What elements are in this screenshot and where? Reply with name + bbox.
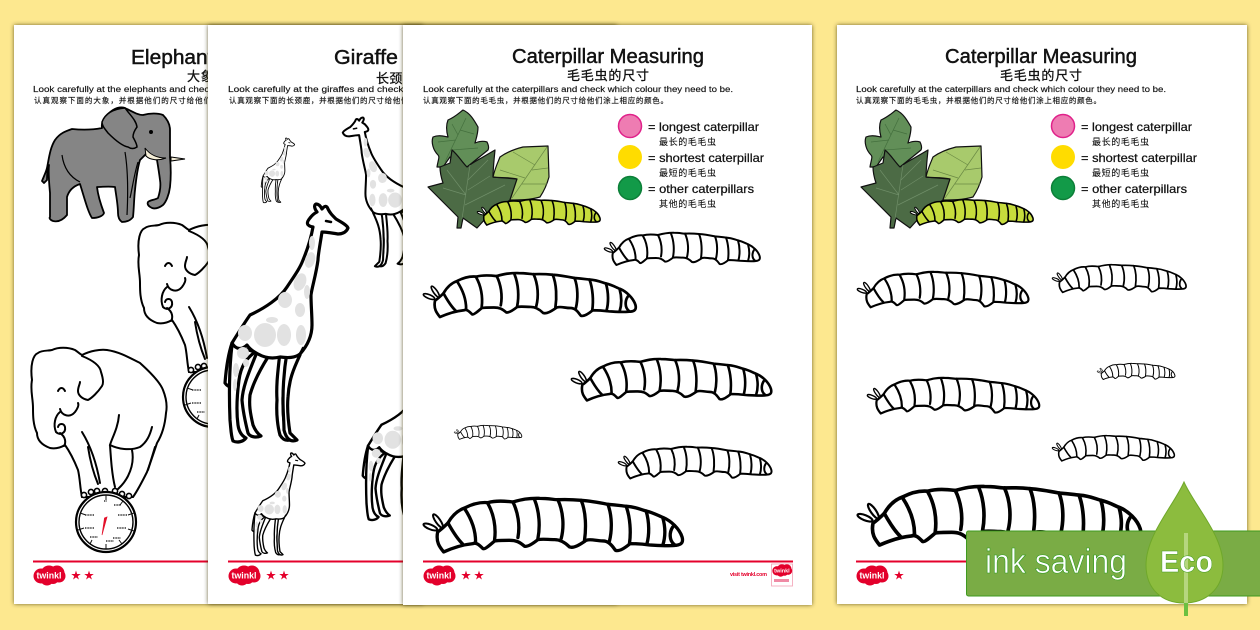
text: elephant instructions: 认真观察下面的大象，并根据他们的尺寸给他们涂上相应的颜色。	[34, 95, 279, 105]
heading: elephant title: Elephant Weighing	[131, 47, 306, 69]
illustration: giraffe top right	[343, 118, 420, 267]
caterpillar 3	[571, 359, 771, 400]
text: right instructions	[856, 85, 1166, 105]
heading: right title: Caterpillar Measuring	[945, 46, 1137, 68]
panel: caterpillar worksheet, front	[403, 25, 812, 605]
illustration: giraffe bottom right	[363, 342, 455, 520]
caterpillar e	[1052, 436, 1174, 461]
caterpillar d	[867, 378, 1039, 413]
panel: giraffe worksheet	[208, 25, 617, 604]
text: elephant instructions: Look carefully at the elephants and check which colour they need to be.	[33, 85, 345, 94]
footer: giraffe sheet	[228, 560, 408, 586]
footer: giraffe sheet: ★★	[266, 571, 292, 582]
text: right instructions: Look carefully at the caterpillars and check which colour they need to be.	[856, 85, 1166, 94]
footer: elephant sheet: ★★	[71, 571, 97, 582]
heading: giraffe title: Giraffe Measuring	[334, 47, 504, 69]
illustration: leaves and legend, right	[861, 110, 1197, 228]
banner: ink saving	[966, 482, 1260, 616]
caterpillar b	[857, 272, 1028, 307]
caterpillar 6	[423, 498, 683, 552]
text: caterpillar instructions: 认真观察下面的毛毛虫，并根据他们的尺寸给他们涂上相应的颜色。	[423, 95, 668, 105]
footer: caterpillar sheet	[423, 560, 793, 586]
panel: caterpillar worksheet, right	[837, 25, 1247, 604]
heading: right Chinese title: 毛毛虫的尺寸	[1000, 68, 1082, 83]
caterpillar 5	[618, 447, 772, 479]
illustration: elephant on scale, lower	[31, 348, 167, 552]
footer: right sheet: ★	[894, 571, 907, 582]
text: right instructions: 认真观察下面的毛毛虫，并根据他们的尺寸给他们涂上相应的颜色。	[856, 95, 1101, 105]
heading: giraffe Chinese title: 长颈鹿的尺寸	[376, 71, 456, 86]
illustration: leaves and legend	[428, 110, 764, 228]
caterpillar c	[1097, 363, 1175, 380]
heading: caterpillar Chinese title: 毛毛虫的尺寸	[567, 68, 649, 83]
footer: right sheet	[856, 560, 976, 586]
text: caterpillar instructions	[423, 85, 733, 105]
text: giraffe instructions	[228, 85, 538, 105]
caterpillar a	[1052, 265, 1186, 292]
banner text: ink saving	[985, 543, 1127, 581]
caterpillar f	[857, 486, 1141, 545]
text: giraffe instructions: 认真观察下面的长颈鹿，并根据他们的尺寸给他们涂上相应的颜色。	[229, 95, 474, 105]
footer: elephant sheet	[33, 560, 403, 586]
eco label: Eco	[1160, 544, 1213, 579]
heading: caterpillar title: Caterpillar Measuring	[512, 46, 704, 68]
footer: caterpillar sheet: ★★	[461, 571, 487, 582]
icon: eco leaf drop	[1146, 482, 1223, 616]
heading: elephant Chinese title: 大象的重量	[187, 69, 255, 84]
footer: caterpillar sheet: visit twinkl.com	[730, 572, 767, 578]
panel: elephant worksheet	[14, 25, 423, 604]
text: giraffe instructions: Look carefully at the giraffes and check which colour they need to be.	[228, 85, 538, 94]
caterpillar 1	[604, 233, 760, 265]
caterpillar 2	[423, 273, 636, 317]
illustration: elephant on scale, upper	[138, 223, 274, 427]
illustration: giraffe large	[225, 204, 348, 442]
text: elephant instructions	[33, 85, 345, 105]
caterpillar 4	[454, 425, 522, 439]
illustration: giraffe bottom	[252, 453, 305, 556]
illustration: grey elephant	[42, 107, 185, 222]
text: caterpillar instructions: Look carefully at the caterpillars and check which colour they need to be.	[423, 85, 733, 94]
illustration: giraffe small	[261, 138, 295, 203]
